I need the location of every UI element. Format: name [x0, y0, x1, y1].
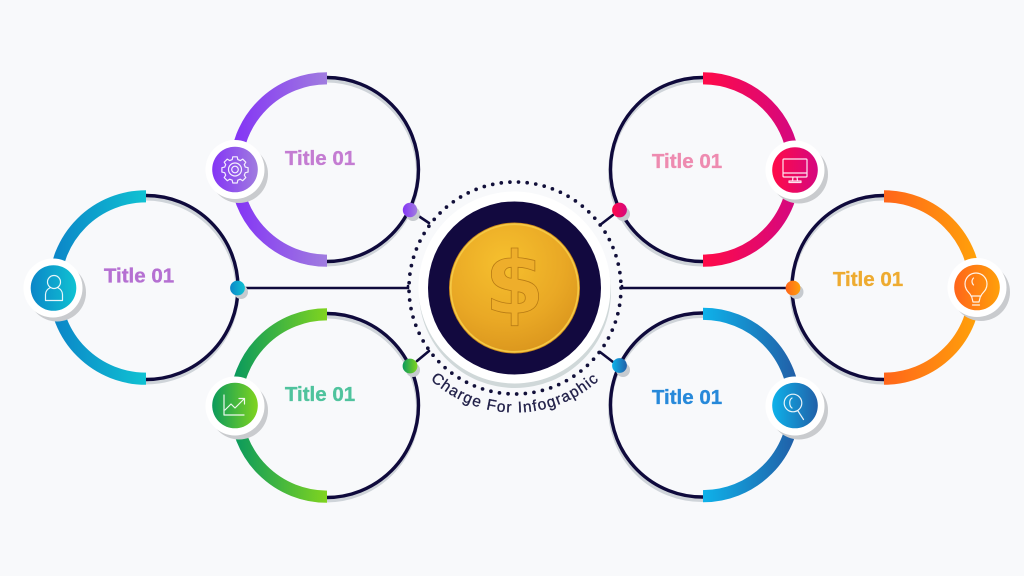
node: cyan: [230, 281, 248, 299]
orange arc: [884, 196, 975, 379]
node: red: [612, 203, 630, 221]
icon: person: [24, 258, 86, 322]
connector lines: [245, 215, 790, 362]
gold coin: $: [485, 234, 544, 334]
dotted ring: [409, 182, 621, 394]
blue arc: [703, 314, 794, 496]
title: top-right: Title 01: [652, 150, 722, 173]
green arc: [236, 314, 327, 497]
node: blue: [612, 358, 630, 377]
red arc: [703, 78, 794, 261]
node: purple: [403, 203, 420, 221]
node: orange: [786, 281, 804, 299]
title: bottom-left: Title 01: [285, 383, 355, 406]
blue arc: [55, 196, 146, 379]
panel: top-right circle: [610, 78, 828, 264]
title: top-left: Title 01: [285, 147, 355, 170]
white ring with shadow: [418, 192, 611, 388]
navy disc: [428, 202, 601, 374]
title: bottom-right: Title 01: [652, 386, 722, 409]
icon: line chart: [206, 376, 268, 440]
purple arc: [236, 78, 327, 261]
panel: bottom-left circle: [206, 314, 420, 500]
title: left: Title 01: [104, 264, 174, 288]
icon: light bulb: [948, 258, 1010, 321]
node: green: [403, 359, 420, 377]
title: right: Title 01: [833, 268, 903, 291]
center coin badge: [407, 180, 623, 413]
icon: magnifier: [766, 376, 828, 440]
curved caption: [407, 350, 623, 413]
center coin badge: Charge For Infographic: [432, 374, 598, 413]
icon: gear: [206, 140, 268, 203]
gold coin: [449, 222, 580, 354]
panel: bottom-right circle: [610, 313, 828, 500]
icon: monitor: [766, 140, 828, 204]
panel: top-left circle: [206, 78, 420, 264]
panel: right circle: [786, 196, 1010, 382]
panel: left circle: [24, 196, 248, 382]
